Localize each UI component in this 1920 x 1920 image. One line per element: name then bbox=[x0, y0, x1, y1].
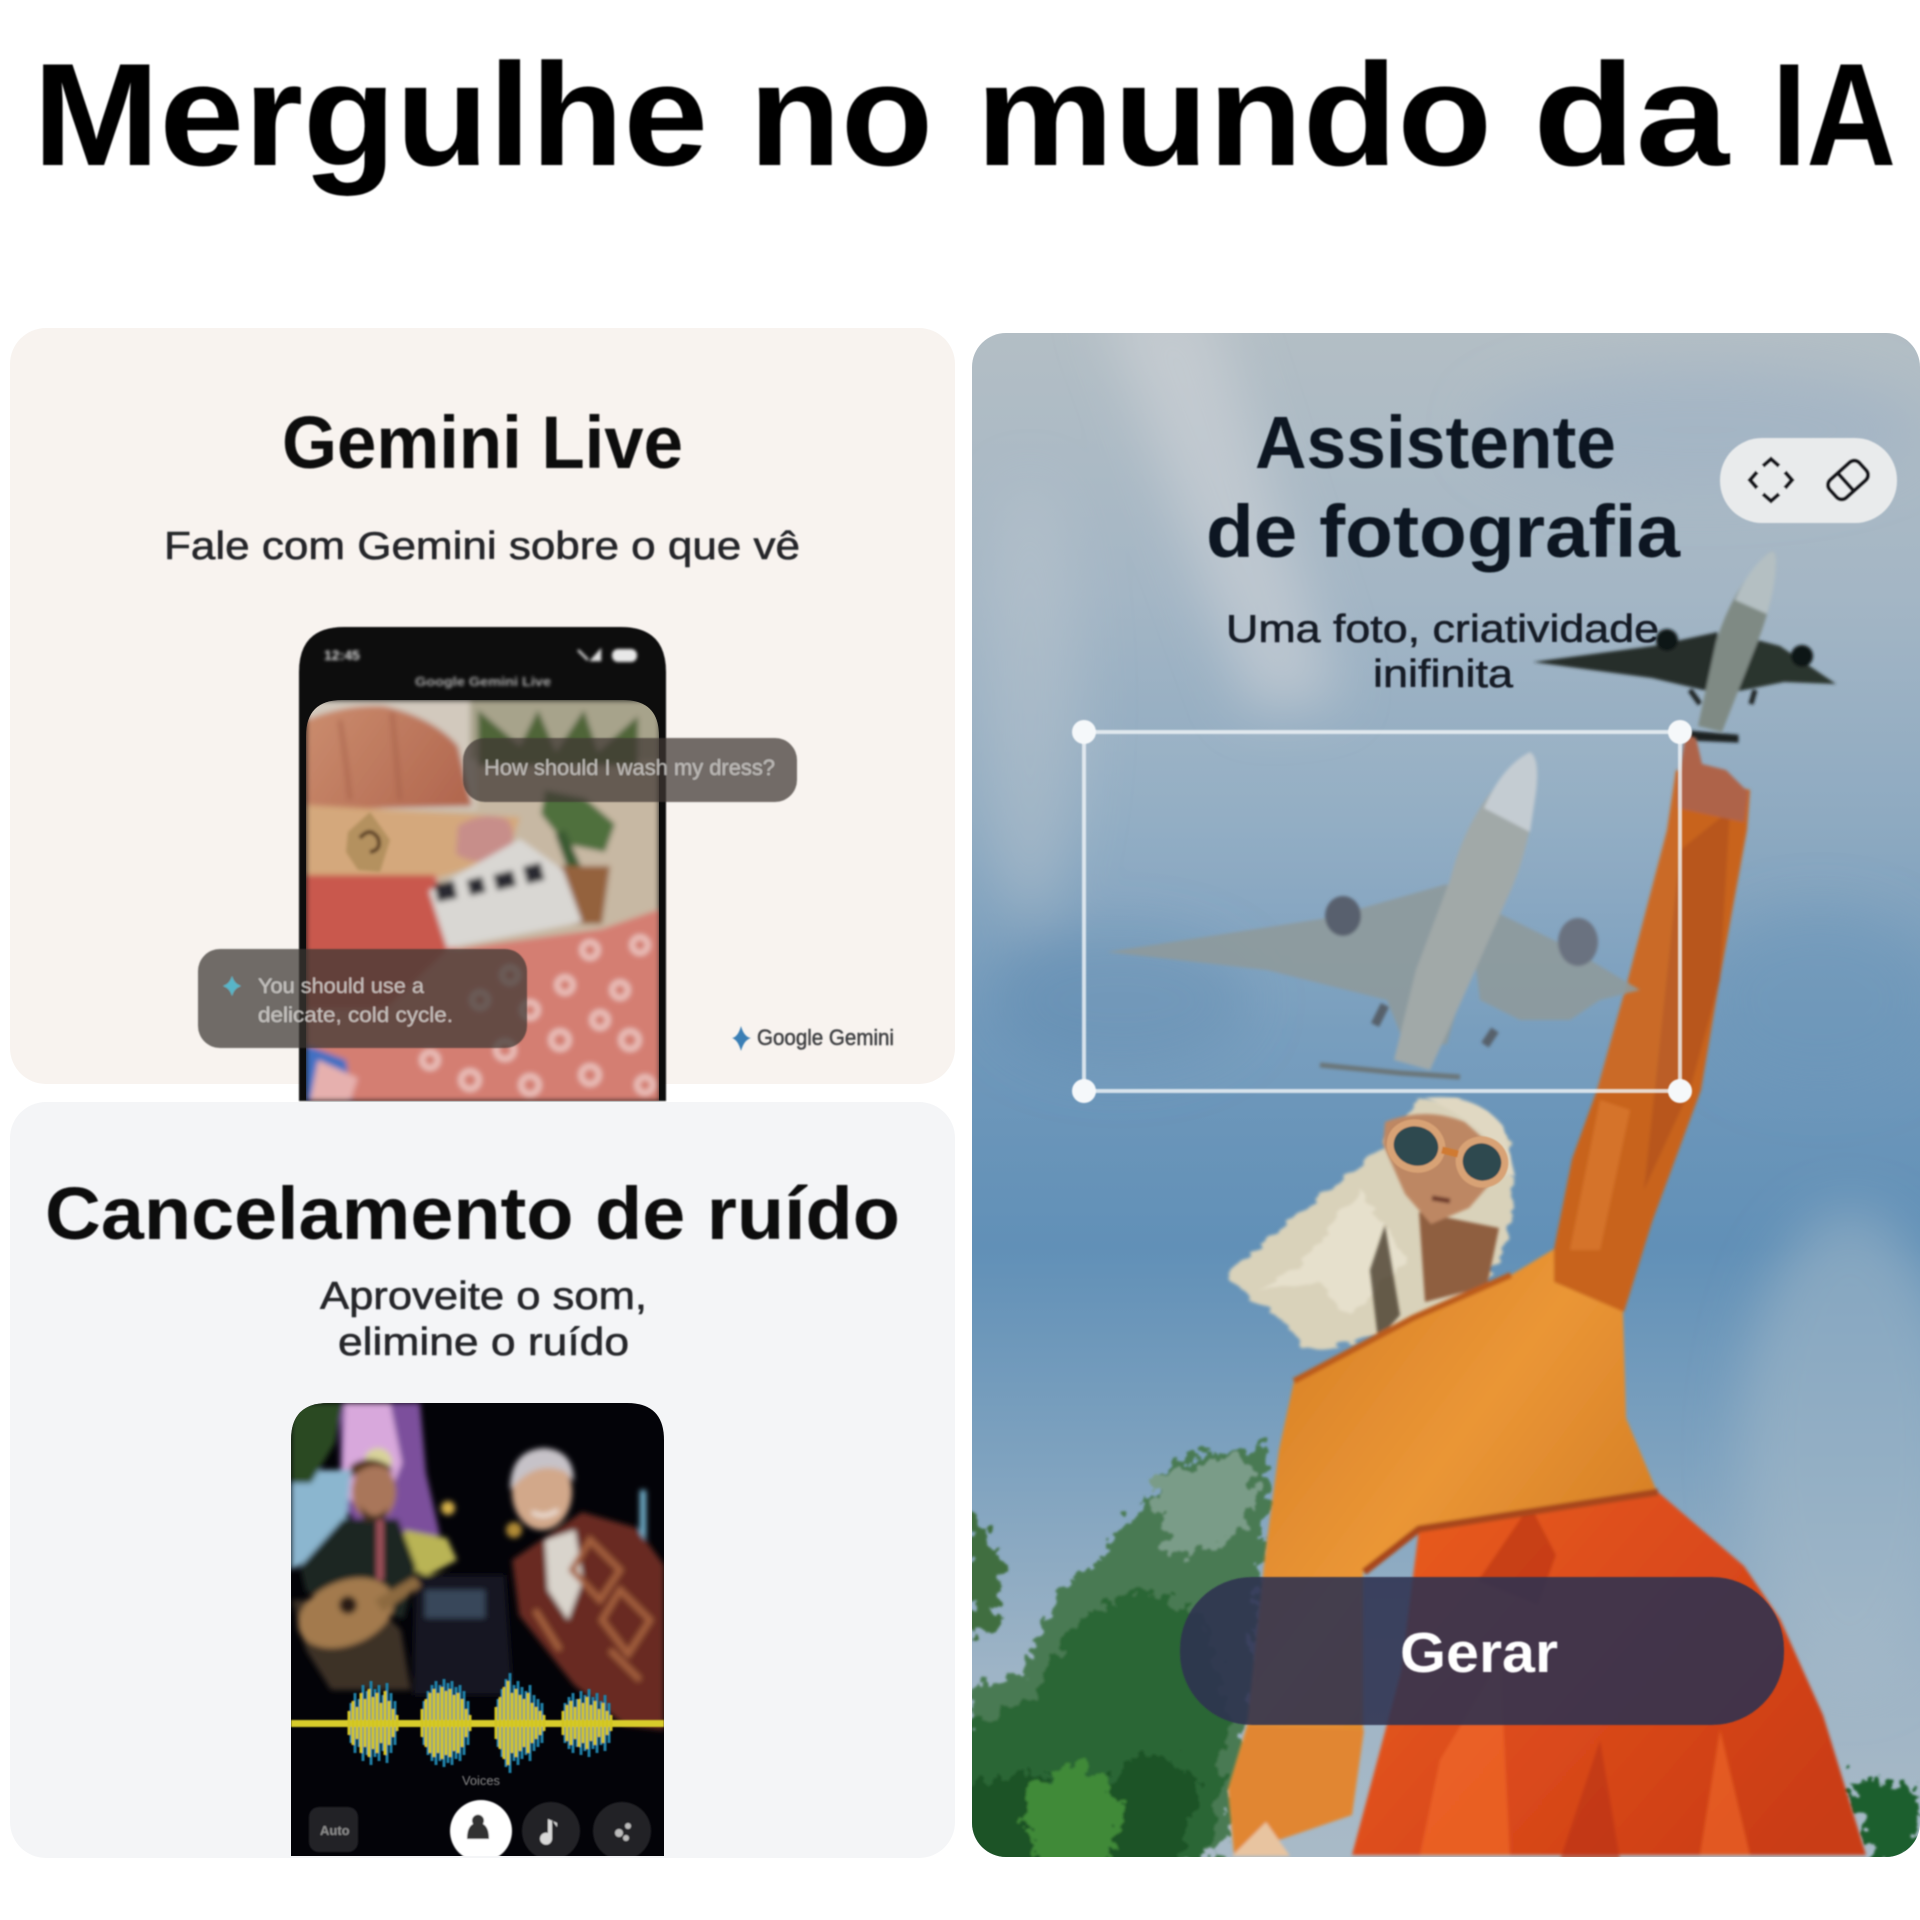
subtitle: Aproveite o som, bbox=[320, 1275, 647, 1318]
button: Gerar: Gerar bbox=[1400, 1621, 1558, 1685]
panel: Cancelamento de ruído bbox=[10, 1102, 955, 1862]
phone body bbox=[299, 627, 666, 1101]
panel: Gemini Live bbox=[10, 328, 955, 1101]
panel background bbox=[10, 1102, 955, 1858]
selection handles bbox=[1072, 720, 1692, 1103]
status bar bbox=[324, 647, 637, 689]
ring bbox=[346, 812, 390, 872]
face bbox=[1383, 1114, 1509, 1224]
chat bubble: question: How should I wash my dress? bbox=[484, 755, 775, 780]
heading: Assistente de fotografia: de fotografia bbox=[1206, 490, 1681, 573]
selection frame bbox=[1084, 732, 1680, 1091]
sky background bbox=[972, 333, 1920, 1857]
subtitle bbox=[320, 1275, 647, 1364]
fingers of lowered hand bbox=[1232, 1822, 1290, 1856]
night background bbox=[291, 1403, 664, 1856]
subtitle bbox=[1228, 612, 1658, 689]
sweater bbox=[1228, 1219, 1657, 1855]
controls bbox=[309, 1773, 651, 1862]
sweater hem bbox=[1364, 1492, 1658, 1572]
title: Mergulhe bbox=[33, 33, 708, 196]
subtitle: Fale com Gemini sobre o que vê bbox=[164, 525, 800, 568]
raised arm bbox=[1554, 770, 1750, 1312]
clouds bbox=[980, 300, 1920, 1690]
phone screen: musicians with audio controls bbox=[288, 1403, 664, 1862]
panel: Assistente de fotografia bbox=[960, 300, 1920, 1870]
hair bbox=[1223, 1100, 1511, 1349]
phone mockup bbox=[299, 627, 666, 1101]
woman in orange bbox=[960, 734, 1920, 1870]
waveform bbox=[291, 1673, 664, 1773]
icon: eraser bbox=[1825, 458, 1871, 502]
man in patterned shirt bbox=[512, 1512, 664, 1730]
status bar: Google Gemini Live bbox=[415, 674, 551, 689]
trees bbox=[960, 1445, 1920, 1870]
sleeve cuff bbox=[1229, 1725, 1364, 1855]
title: da bbox=[1533, 33, 1731, 196]
pants bbox=[1352, 1492, 1866, 1855]
car bbox=[413, 1575, 513, 1695]
icon: resize bbox=[1750, 459, 1792, 501]
neon street bbox=[340, 1403, 440, 1545]
camera photo: hand holding clothing label bbox=[306, 700, 660, 1101]
chat bubble: answer: delicate, cold cycle. bbox=[258, 1004, 453, 1027]
heading: Assistente de fotografia bbox=[1206, 401, 1681, 573]
title: mundo bbox=[976, 33, 1492, 196]
hand bbox=[1678, 734, 1748, 822]
title: no bbox=[749, 33, 933, 196]
button: Gerar bbox=[1180, 1577, 1784, 1725]
chat bubble: question bbox=[463, 738, 797, 802]
man with guitar bbox=[300, 1519, 416, 1619]
sunglasses bbox=[1385, 1117, 1512, 1192]
status bar: 12:45 bbox=[324, 647, 360, 663]
subtitle: elimine o ruído bbox=[338, 1321, 629, 1364]
small airplane bbox=[1533, 552, 1836, 740]
selection area bbox=[1072, 720, 1692, 1103]
subtitle: Uma foto, criatividade bbox=[1226, 608, 1659, 651]
title bbox=[33, 33, 1896, 196]
toolbar with icons bbox=[1720, 438, 1897, 523]
controls: Voices bbox=[462, 1773, 500, 1788]
heading: Cancelamento de ruído: Cancelamento de ruído bbox=[45, 1172, 900, 1255]
heading: Assistente de fotografia: Assistente bbox=[1255, 401, 1616, 484]
erased airplane bbox=[1107, 752, 1640, 1077]
panel background bbox=[10, 328, 955, 1084]
neck bbox=[1419, 1212, 1499, 1302]
chat bubble: answer: You should use a bbox=[258, 975, 424, 998]
Google Gemini logo: Google Gemini bbox=[757, 1025, 894, 1050]
subtitle: inifinita bbox=[1373, 653, 1513, 696]
title: IA bbox=[1772, 33, 1896, 196]
controls: Auto bbox=[320, 1823, 350, 1838]
heading: Gemini Live: Gemini Live bbox=[282, 401, 683, 484]
chat bubble: answer bbox=[198, 949, 527, 1048]
